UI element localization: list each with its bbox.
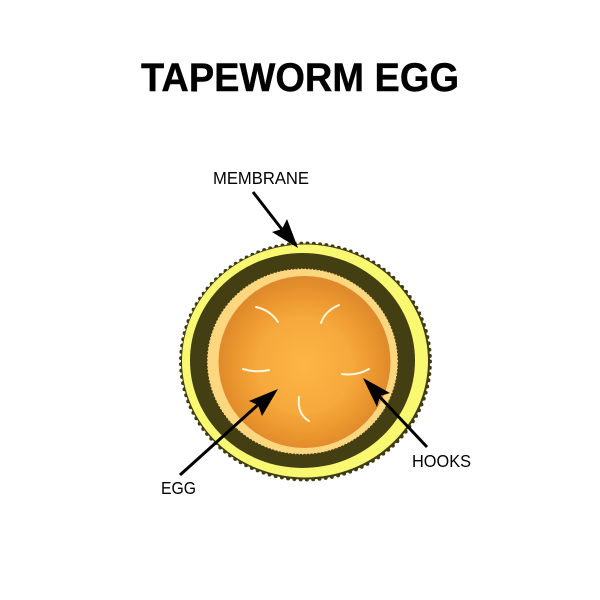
title: TAPEWORM EGG (141, 56, 459, 100)
outer membrane scallops (181, 244, 430, 480)
label: membrane: MEMBRANE (213, 168, 309, 188)
yellow layer (182, 244, 428, 478)
egg diagram (181, 244, 430, 480)
arrow: hooks (363, 378, 427, 447)
dark layer (190, 253, 415, 468)
hooks (243, 305, 369, 421)
arrow: egg (180, 389, 278, 475)
pale layer (208, 269, 398, 454)
label: hooks: HOOKS (412, 451, 471, 471)
egg core (218, 276, 390, 448)
arrow: membrane (253, 192, 298, 248)
label: egg: EGG (161, 478, 196, 498)
